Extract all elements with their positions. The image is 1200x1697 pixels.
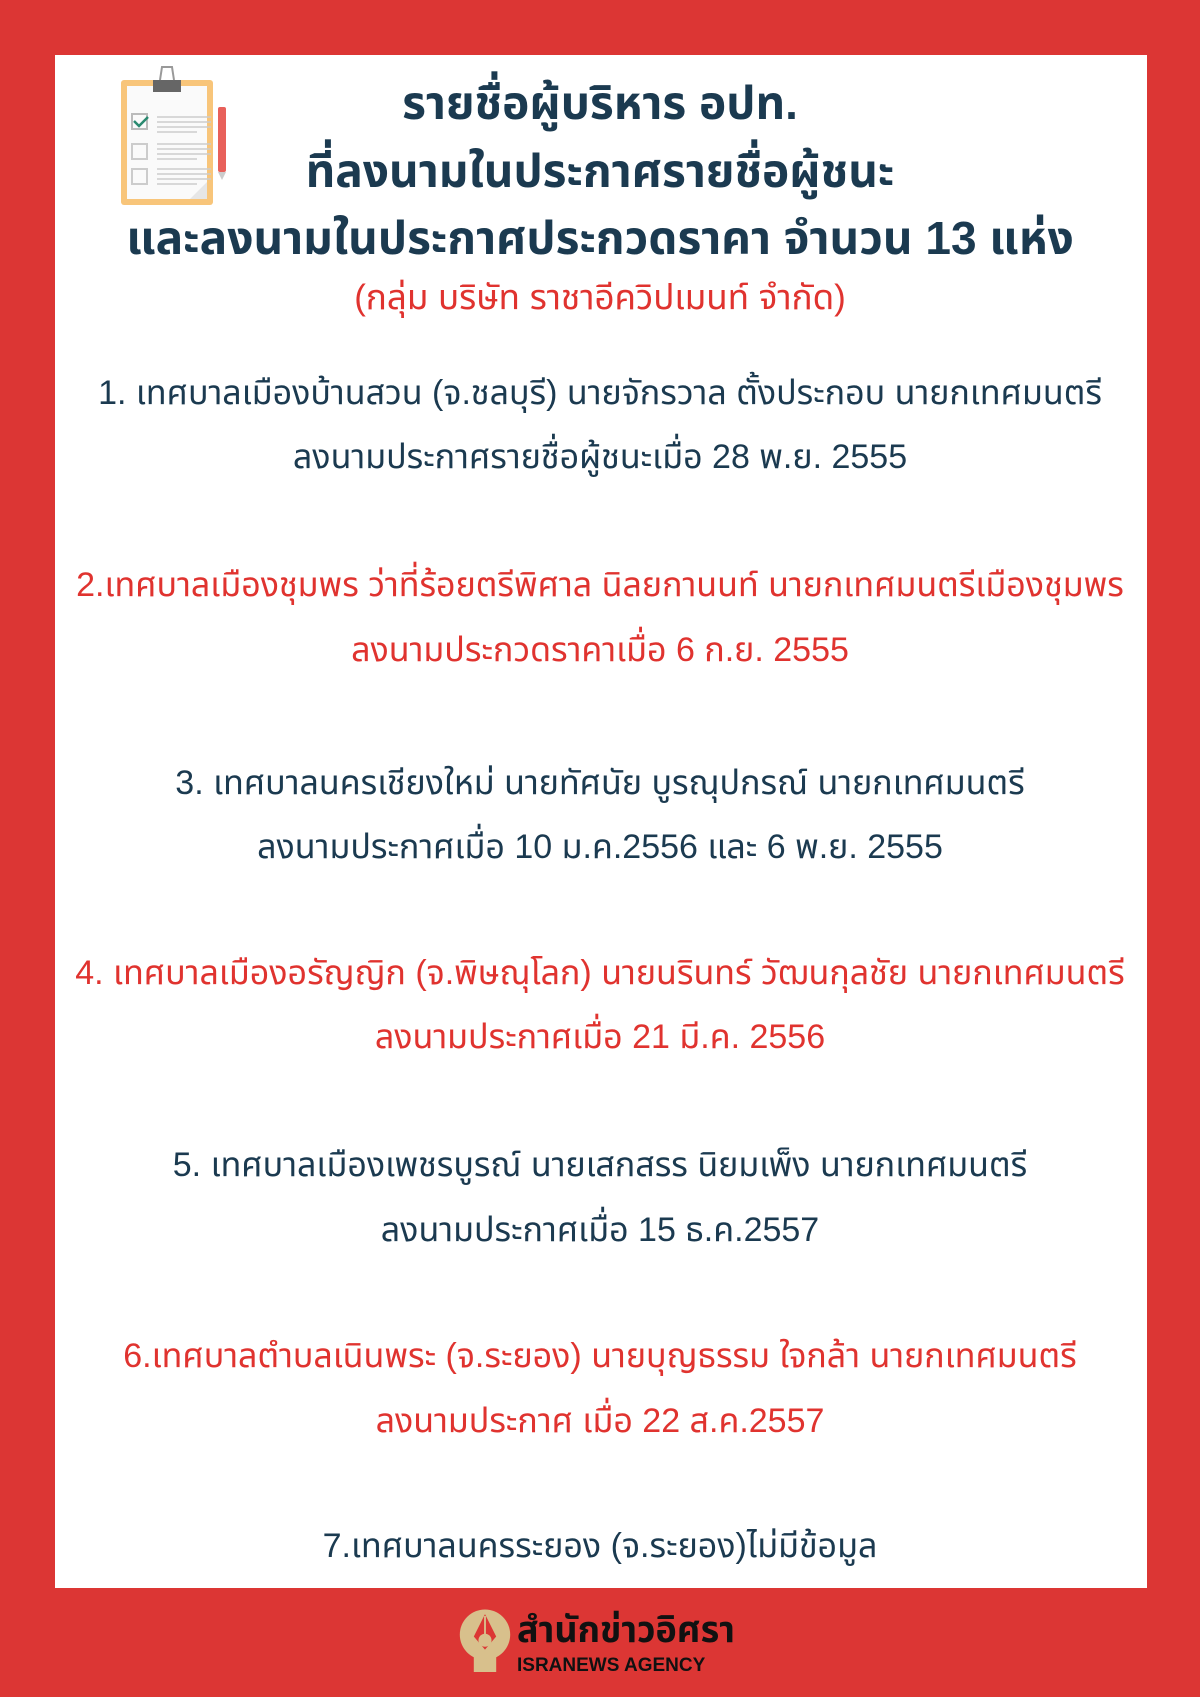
- item 2: 2.เทศบาลเมืองชุมพร ว่าที่ร้อยตรีพิศาล นิลยกานนท์ นายกเทศมนตรีเมืองชุมพร: [76, 566, 1124, 604]
- logo text: สำนักข่าวอิศรา: [517, 1609, 735, 1650]
- item 6: ลงนามประกาศ เมื่อ 22 ส.ค.2557: [376, 1402, 824, 1440]
- icon: logo emblem: [460, 1610, 510, 1672]
- footer logo: [460, 1609, 735, 1676]
- item 2: ลงนามประกวดราคาเมื่อ 6 ก.ย. 2555: [351, 631, 849, 669]
- item 1: 1. เทศบาลเมืองบ้านสวน (จ.ชลบุรี) นายจักรวาล ตั้งประกอบ นายกเทศมนตรี: [98, 374, 1102, 412]
- item 3: [175, 764, 1025, 866]
- item 6: [123, 1337, 1077, 1440]
- title: และลงนามในประกาศประกวดราคา จำนวน 13 แห่ง: [126, 212, 1074, 264]
- icon: clipboard: [121, 66, 226, 205]
- item 5: 5. เทศบาลเมืองเพชรบูรณ์ นายเสกสรร นิยมเพ็ง นายกเทศมนตรี: [173, 1146, 1027, 1184]
- item 2: [76, 562, 1124, 669]
- item 4: [75, 954, 1125, 1056]
- item 5: ลงนามประกาศเมื่อ 15 ธ.ค.2557: [381, 1211, 819, 1249]
- item 5: [173, 1146, 1027, 1249]
- item 3: 3. เทศบาลนครเชียงใหม่ นายทัศนัย บูรณุปกรณ์ นายกเทศมนตรี: [175, 764, 1025, 802]
- item 1: [98, 372, 1102, 477]
- footer logo: ISRANEWS AGENCY: [517, 1655, 705, 1676]
- item 4: 4. เทศบาลเมืองอรัญญิก (จ.พิษณุโลก) นายนรินทร์ วัฒนกุลชัย นายกเทศมนตรี: [75, 954, 1125, 992]
- subtitle: (กลุ่ม บริษัท ราชาอีควิปเมนท์ จำกัด): [354, 278, 846, 317]
- item 4: ลงนามประกาศเมื่อ 21 มี.ค. 2556: [375, 1018, 825, 1056]
- title: รายชื่อผู้บริหาร อปท.: [402, 77, 798, 129]
- item 6: 6.เทศบาลตำบลเนินพระ (จ.ระยอง) นายบุญธรรม ใจกล้า นายกเทศมนตรี: [123, 1337, 1077, 1375]
- title: ที่ลงนามในประกาศรายชื่อผู้ชนะ: [306, 145, 894, 197]
- title: [126, 71, 1074, 264]
- item 3: ลงนามประกาศเมื่อ 10 ม.ค.2556 และ 6 พ.ย. 2555: [257, 828, 943, 866]
- item 1: ลงนามประกาศรายชื่อผู้ชนะเมื่อ 28 พ.ย. 2555: [293, 438, 907, 476]
- item 7: 7.เทศบาลนครระยอง (จ.ระยอง)ไม่มีข้อมูล: [323, 1527, 877, 1565]
